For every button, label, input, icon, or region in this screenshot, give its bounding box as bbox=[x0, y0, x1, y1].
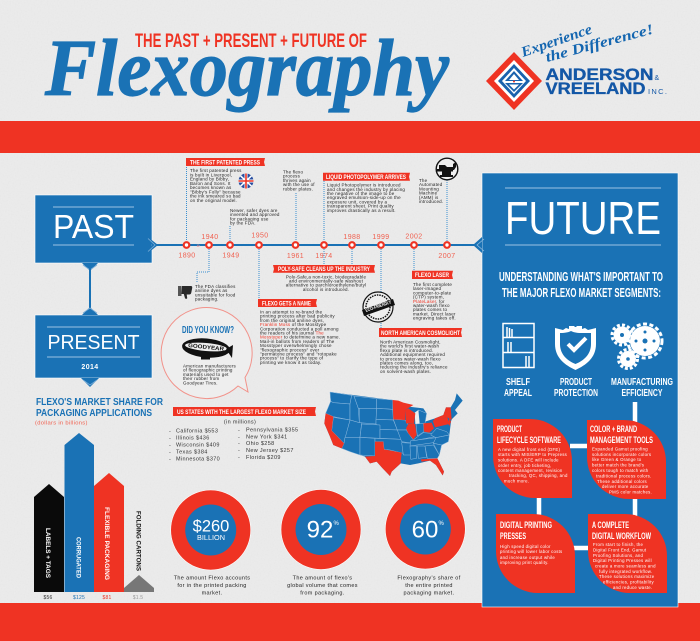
list: top states column 2: Pennsylvania $355 bbox=[246, 428, 298, 434]
heading: US states bbox=[173, 407, 316, 416]
heading: past: PAST bbox=[53, 208, 134, 245]
list: top states column 1: - bbox=[169, 456, 173, 462]
petal: digital printing presses: printing will lower labor costs bbox=[500, 549, 562, 554]
subtitle: THE PAST + PRESENT + FUTURE OF bbox=[135, 31, 367, 52]
petal: color + brand management tools: like Green & Orange to bbox=[592, 457, 642, 462]
top red band bbox=[0, 121, 700, 153]
heading: market share bbox=[36, 396, 163, 419]
body text: introduced. bbox=[419, 199, 443, 204]
event: safer dyes: invented and approved bbox=[230, 212, 280, 217]
petal: a complete digital workflow: These solutions maximize bbox=[599, 574, 655, 579]
speech bubble bbox=[161, 308, 252, 399]
event: flexo process thrives: with the use of bbox=[283, 182, 315, 187]
petal: color + brand management tools: better match the brand's bbox=[592, 462, 644, 468]
list: top states column 1: Texas $384 bbox=[176, 450, 208, 456]
list: top states column 1: Illinois $436 bbox=[176, 436, 210, 442]
label: manufacturing efficiency: EFFICIENCY bbox=[622, 388, 663, 399]
bar: folding cartons bbox=[124, 511, 154, 601]
event: flexo process thrives: process bbox=[283, 174, 301, 179]
petal: product lifecycle software: much more. bbox=[504, 478, 529, 483]
heading: market share: PACKAGING APPLICATIONS bbox=[36, 407, 152, 419]
event: FDA classifies aniline dyes bbox=[178, 284, 236, 302]
body text: Baron and Sons. It bbox=[190, 181, 231, 186]
label: shelf appeal: SHELF bbox=[506, 377, 530, 388]
banner: NORTH AMERICAN COSMOLIGHT bbox=[381, 330, 460, 337]
caption: Flexography's share of bbox=[397, 576, 461, 582]
body text: (CTP) system, bbox=[413, 295, 444, 300]
body text: is built in Liverpool, bbox=[190, 172, 232, 177]
petal: color + brand management tools bbox=[587, 420, 666, 499]
event: flexo process thrives: The flexo bbox=[283, 170, 303, 174]
heading: market share: FLEXO'S MARKET SHARE FOR bbox=[36, 396, 163, 408]
event: flexo gets a name bbox=[258, 299, 340, 365]
list: top states column 2: - bbox=[238, 448, 242, 454]
petal: a complete digital workflow: DIGITAL WORKFLOW bbox=[592, 531, 651, 542]
body text: Goodyear Tires. bbox=[183, 380, 218, 385]
body text: , for bbox=[436, 299, 445, 304]
timeline years bbox=[178, 232, 456, 260]
body text: engraved emulsion-side-up on the bbox=[327, 195, 401, 200]
banner: FLEXO LASER bbox=[415, 272, 449, 279]
company name: ANDERSON bbox=[546, 65, 654, 84]
stamp: eco-friendly: ECO-FRIENDLY bbox=[365, 299, 392, 313]
body text: The bbox=[419, 178, 428, 183]
icon: shield bbox=[555, 326, 596, 370]
panel: future bbox=[473, 173, 678, 607]
petal: a complete digital workflow: and reduce waste. bbox=[613, 585, 652, 590]
petal: digital printing presses: and increase output while bbox=[500, 555, 555, 560]
body text: flexo plate is introduced. bbox=[380, 348, 433, 353]
body text: printing we know it as today. bbox=[260, 360, 321, 365]
petal: product lifecycle software: solutions. A DFE will include bbox=[498, 457, 559, 462]
banner: LIQUID PHOTOPOLYMER ARRIVES bbox=[326, 174, 407, 181]
panel: past bbox=[35, 195, 158, 271]
label: shelf appeal bbox=[504, 377, 532, 399]
petal: a complete digital workflow: Digital Printing Presses will bbox=[593, 558, 652, 563]
body text: to process water-wash flexo bbox=[380, 356, 441, 361]
list: top states column 2: New York $341 bbox=[246, 434, 288, 440]
petal: product lifecycle software: LIFECYCLE SOFTWARE bbox=[497, 435, 561, 446]
timeline nodes bbox=[184, 242, 450, 248]
petal: product lifecycle software: order entry, job ticketing, bbox=[498, 463, 551, 468]
stat: 60% bbox=[385, 489, 465, 596]
petal: digital printing presses: improving print quality. bbox=[500, 560, 549, 565]
body text: Mounting bbox=[419, 186, 439, 191]
petal: color + brand management tools: Expanded Gamut proofing bbox=[592, 446, 648, 452]
body text: on the original model. bbox=[190, 198, 237, 203]
bar: labels + tags: LABELS + TAGS bbox=[44, 528, 51, 579]
company name: INC. bbox=[648, 87, 667, 96]
event: flexo process thrives: rubber plates. bbox=[283, 186, 313, 191]
petal: product lifecycle software bbox=[493, 419, 572, 498]
list: top states column 2: - bbox=[238, 428, 242, 434]
icon: logo diamond bbox=[486, 52, 542, 110]
body text: "Bibby's Folly" because bbox=[190, 189, 241, 194]
petal: color + brand management tools: PMS color matches. bbox=[609, 490, 652, 494]
body text: Franklin Moss bbox=[260, 322, 291, 327]
icon: union flag bbox=[238, 174, 254, 188]
stat: $260 billion: $260 bbox=[193, 518, 229, 536]
petal: a complete digital workflow: A COMPLETE bbox=[592, 520, 629, 531]
event: safer dyes: for packaging use bbox=[230, 216, 269, 221]
body text: PlateLaser bbox=[413, 299, 437, 304]
connectors between petals bbox=[539, 402, 635, 548]
dotted leader lines bbox=[186, 167, 447, 328]
bar: flexible packaging: FLEXIBLE PACKAGING bbox=[103, 507, 110, 580]
caption: for in the printed packing bbox=[177, 583, 247, 589]
petal: a complete digital workflow bbox=[588, 514, 667, 593]
event: poly-safe bbox=[273, 265, 375, 292]
body text: (AMM) is bbox=[419, 195, 439, 200]
event: flexo laser bbox=[412, 271, 456, 321]
event: liquid photopolymer bbox=[323, 173, 410, 213]
body text: Automated bbox=[419, 182, 443, 187]
petal: color + brand management tools: MANAGEMENT TOOLS bbox=[590, 435, 653, 446]
event: flexo process thrives: thrives again bbox=[283, 178, 311, 183]
event: safer dyes: by the FDA. bbox=[230, 221, 256, 226]
stamp: eco-friendly bbox=[362, 292, 395, 322]
body text: alternative to parchloroethylene/butyl bbox=[286, 283, 366, 288]
list: top states column 2: - bbox=[238, 441, 242, 447]
body text: American manufacturers bbox=[183, 364, 237, 368]
body text: "flexographic process" over bbox=[260, 347, 320, 352]
banner: FLEXO GETS A NAME bbox=[262, 300, 312, 307]
company name: VREELAND bbox=[546, 79, 646, 98]
petal: a complete digital workflow: Proofing Solutions, and bbox=[593, 553, 644, 558]
timeline years: 1988 bbox=[343, 234, 361, 241]
body text: the world's first water-wash bbox=[380, 344, 439, 349]
body text: Mail-in ballots from readers of The bbox=[260, 339, 335, 344]
bar: corrugated bbox=[64, 433, 94, 601]
petal: product lifecycle software: PRODUCT bbox=[497, 424, 522, 435]
list: top states column 1: California $553 bbox=[176, 428, 218, 434]
label: manufacturing efficiency bbox=[611, 377, 673, 399]
icon: thumbs down bbox=[178, 286, 192, 299]
timeline years: 1940 bbox=[201, 234, 219, 241]
stat: $260 billion bbox=[171, 490, 251, 596]
bottom red band bbox=[0, 603, 700, 641]
caption: global volume that comes bbox=[287, 583, 358, 589]
icon: machine bbox=[436, 158, 458, 180]
body text: Poly-Safe,a non-toxic, biodegradable bbox=[286, 274, 366, 280]
base land bbox=[324, 392, 463, 476]
body text: exposure unit, covered by a bbox=[327, 199, 387, 204]
label: product protection: PRODUCT bbox=[560, 377, 592, 388]
list: top states column 2: Ohio $258 bbox=[246, 441, 275, 447]
petal: digital printing presses: High speed digital color bbox=[500, 544, 551, 549]
list: top states column 2: - bbox=[238, 455, 242, 461]
caption: packaging market. bbox=[404, 590, 455, 596]
timeline years: 2002 bbox=[405, 234, 423, 240]
petal: a complete digital workflow: From start to finish, the bbox=[593, 542, 644, 547]
label: manufacturing efficiency: MANUFACTURING bbox=[611, 377, 673, 388]
body text: The first patented press bbox=[190, 168, 242, 173]
petal: product lifecycle software: content management, revision bbox=[498, 468, 563, 473]
note: in millions: (in millions) bbox=[224, 420, 256, 426]
timeline axis bbox=[156, 244, 478, 246]
body text: laser-imaged bbox=[413, 286, 441, 291]
body text: transparent sheet. Print quality bbox=[327, 204, 394, 209]
body text: alcohol is introduced. bbox=[303, 287, 349, 292]
caption: The amount of flexo's bbox=[293, 576, 352, 582]
body text: unsuitable for food bbox=[195, 292, 236, 297]
body text: The bbox=[316, 330, 324, 336]
body text: printing process after bad publicity bbox=[260, 314, 335, 319]
timeline years: 1950 bbox=[251, 232, 269, 240]
body text: North American Cosmolight, bbox=[380, 340, 441, 344]
map: United States bbox=[324, 392, 463, 476]
event: automated mounting machine bbox=[419, 158, 458, 204]
body text: of flexographic printing bbox=[183, 368, 233, 373]
petal: a complete digital workflow: Digital Front End, Gamut bbox=[593, 548, 647, 552]
title: Flexography bbox=[44, 25, 449, 113]
bar: corrugated: $125 bbox=[73, 595, 85, 601]
body text: of the Mosstype bbox=[290, 322, 327, 327]
body text: on solvent-wash plates. bbox=[380, 369, 431, 374]
connector: past to present bbox=[89, 265, 91, 315]
petal: color + brand management tools: COLOR + BRAND bbox=[590, 424, 637, 435]
body text: Liquid Photopolymer is introduced bbox=[327, 182, 401, 188]
subheading bbox=[499, 269, 663, 300]
petal: product lifecycle software: A new digital front end (DFE) bbox=[498, 447, 560, 452]
petal: color + brand management tools: colors tough to match with bbox=[592, 468, 649, 473]
body text: the ink smeared so bad bbox=[190, 194, 241, 198]
banner: POLY-SAFE CLEANS UP THE INDUSTRY bbox=[278, 266, 371, 273]
petal: a complete digital workflow: fully integrated workflow. bbox=[599, 569, 652, 574]
body text: to determine a new name. bbox=[282, 335, 340, 340]
body text: market. Direct laser bbox=[413, 311, 456, 316]
icon: gears bbox=[612, 324, 662, 368]
stat: 60%: % bbox=[438, 521, 444, 527]
list: top states column 1: - bbox=[169, 428, 173, 434]
body text: packaging. bbox=[195, 297, 219, 302]
tagline: the Difference! bbox=[544, 22, 655, 66]
stat: 92%: 92 bbox=[307, 516, 333, 544]
caption: from packaging. bbox=[300, 590, 345, 596]
timeline years: 2007 bbox=[438, 253, 456, 260]
bar chart: market share bbox=[34, 433, 154, 601]
petal: a complete digital workflow: efficiencies, profitability bbox=[603, 580, 654, 584]
company name: & bbox=[654, 75, 660, 82]
body text: plates comes along, too, bbox=[380, 360, 433, 366]
petal: color + brand management tools: traditional process colors. bbox=[596, 474, 651, 478]
petal: digital printing presses: DIGITAL PRINTING bbox=[500, 520, 552, 531]
body text: plates comes to bbox=[413, 307, 448, 312]
body text: The FDA classifies bbox=[195, 284, 236, 289]
label: product protection bbox=[554, 377, 598, 399]
body text: Mosstyper bbox=[260, 335, 283, 340]
body text: Machine bbox=[419, 191, 438, 196]
banner: THE FIRST PATENTED PRESS bbox=[190, 159, 261, 166]
body text: computer-to-plate bbox=[413, 290, 452, 295]
year 2014: 2014 bbox=[81, 364, 99, 371]
body text: from the original aniline dyes, bbox=[260, 318, 324, 323]
icon: shelf bbox=[503, 324, 534, 368]
bar: folding cartons: FOLDING CARTONS bbox=[134, 511, 142, 572]
logo: Anderson & Vreeland bbox=[486, 21, 667, 110]
note: dollars in billions: (dollars in billions) bbox=[35, 420, 88, 426]
great lakes bbox=[415, 410, 420, 424]
body text: aniline dyes as bbox=[195, 288, 228, 293]
caption: the entire printed bbox=[405, 583, 453, 589]
panel: present bbox=[35, 307, 152, 387]
timeline years: 1999 bbox=[372, 234, 390, 241]
body text: reducing the industry's reliance bbox=[380, 365, 448, 370]
body text: engraving takes off. bbox=[413, 316, 456, 321]
stat: 92% bbox=[281, 490, 361, 596]
list: top states column 2: - bbox=[238, 434, 242, 440]
heading: future: FUTURE bbox=[505, 192, 661, 244]
timeline years: 1961 bbox=[287, 253, 304, 260]
body text: England by Bibby, bbox=[190, 176, 229, 182]
states in blue bbox=[326, 392, 449, 459]
body text: Additional equipment required bbox=[380, 352, 445, 357]
petal: digital printing presses bbox=[496, 514, 575, 593]
heading: DID YOU KNOW? bbox=[182, 325, 234, 336]
tagline bbox=[518, 21, 655, 66]
body text: and environmentally-safe washout bbox=[289, 279, 364, 284]
heading: US states: US STATES WITH THE LARGEST FLEXO MARKET SIZE bbox=[177, 409, 307, 416]
stat: 92%: % bbox=[334, 521, 340, 527]
body text: the negative of the image to be bbox=[327, 191, 395, 196]
body text: materials used to get bbox=[183, 372, 229, 377]
icon: blimp: GOODYEAR bbox=[188, 343, 224, 353]
petal: digital printing presses: PRESSES bbox=[500, 531, 526, 542]
timeline years: 1949 bbox=[222, 252, 240, 260]
event: first patented press bbox=[186, 158, 265, 203]
list: top states column 2: New Jersey $257 bbox=[246, 448, 294, 454]
stat: $260 billion: BILLION bbox=[197, 533, 225, 542]
company name bbox=[546, 65, 667, 98]
petal: color + brand management tools: solutions incorporate colors bbox=[592, 452, 651, 457]
stat: 60%: 60 bbox=[412, 516, 438, 544]
body text: their rubber from bbox=[183, 376, 219, 381]
event: north american cosmolight bbox=[379, 328, 462, 374]
label: shelf appeal: APPEAL bbox=[504, 388, 532, 399]
bar: flexible packaging: $81 bbox=[103, 595, 111, 601]
body text: water-wash flexo bbox=[413, 303, 450, 308]
bar: corrugated: CORRUGATED bbox=[74, 537, 82, 578]
list: top states column 1: Minnesota $370 bbox=[176, 456, 220, 462]
event: safer dyes: Newer, safer dyes are bbox=[230, 208, 278, 213]
body text: The first complete bbox=[413, 282, 452, 287]
timeline years: 1974 bbox=[315, 253, 333, 260]
caption: market. bbox=[202, 590, 223, 596]
body text: and changes the industry by placing bbox=[327, 187, 405, 192]
list: top states column 1: - bbox=[169, 436, 173, 442]
body text: "permatone process" and "rotopake bbox=[260, 352, 337, 356]
list: top states column 2: Florida $209 bbox=[246, 455, 281, 461]
bar: labels + tags: $56 bbox=[44, 595, 52, 601]
petal: color + brand management tools: These additional colors bbox=[597, 479, 647, 484]
body text: Corporation conducted a poll among bbox=[260, 326, 339, 331]
bar: folding cartons: $1.5 bbox=[133, 595, 143, 601]
body text: the readers of his journal bbox=[260, 330, 316, 336]
heading: present: PRESENT bbox=[48, 332, 140, 354]
label: product protection: PROTECTION bbox=[554, 388, 598, 399]
bar: flexible packaging bbox=[94, 473, 124, 601]
small timeline chevrons: » bbox=[196, 244, 200, 250]
callout: did you know bbox=[161, 308, 252, 399]
petal: product lifecycle software: tracking, QC, shipping, and bbox=[509, 473, 568, 478]
body text: process" to clarify the type of bbox=[260, 356, 324, 361]
body text: improves drastically as a result. bbox=[327, 208, 396, 213]
petal: a complete digital workflow: create a more seamless and bbox=[595, 564, 656, 568]
list: top states column 1: Wisconsin $409 bbox=[176, 442, 220, 448]
body text: becomes known as bbox=[190, 185, 232, 190]
list: top states column 1: - bbox=[169, 442, 173, 448]
petal: color + brand management tools: deliver more accurate bbox=[602, 484, 649, 489]
body text: In an attempt to re-brand the bbox=[260, 310, 323, 314]
bar: labels + tags bbox=[34, 484, 64, 601]
list: top states column 1: - bbox=[169, 450, 173, 456]
timeline years: 1890 bbox=[178, 252, 196, 260]
states in red bbox=[324, 400, 452, 476]
petal: product lifecycle software: starts with MIS/ERP to Prepress bbox=[498, 452, 567, 457]
caption: The amount Flexo accounts bbox=[174, 576, 250, 582]
tagline: Experience bbox=[518, 21, 595, 61]
body text: Mosstyper overwhelmingly chose bbox=[260, 343, 332, 348]
